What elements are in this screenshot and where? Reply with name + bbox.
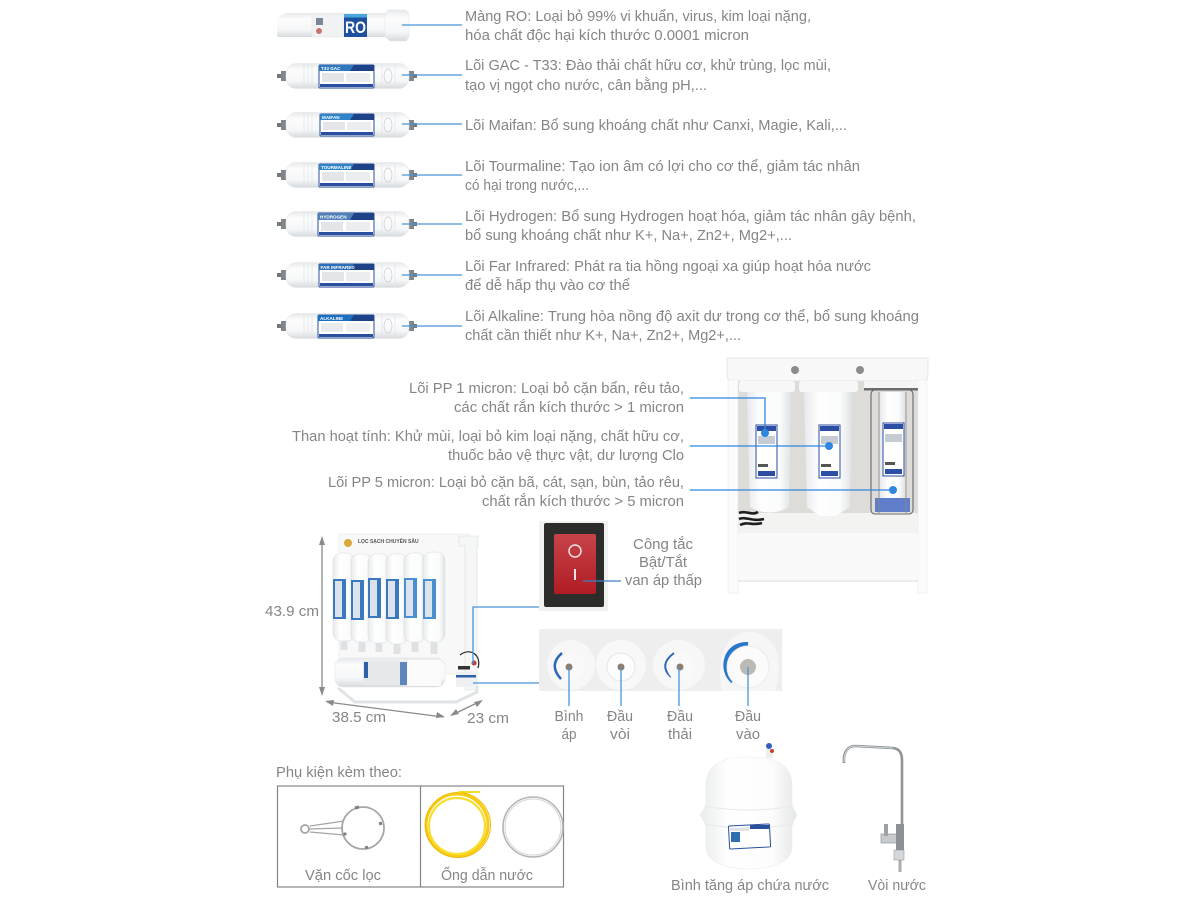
text: Far Infrared: Lõi Far Infrared: Phát ra tia hồng ngoại xa giúp hoạt hóa nước bbox=[465, 258, 871, 275]
cartridge: Tourmaline: TOURMALINE bbox=[321, 165, 352, 170]
text: activated carbon: Than hoạt tính: Khử mùi, loại bỏ kim loại nặng, chất hữu cơ, bbox=[292, 428, 684, 445]
text: port labels: Đầu bbox=[735, 708, 761, 725]
leader lines: pre-filters bbox=[690, 398, 897, 494]
text: faucet label: Vòi nước bbox=[868, 877, 926, 894]
cartridge: Alkaline: ALKALINE bbox=[320, 316, 343, 321]
text: Tourmaline: Lõi Tourmaline: Tạo ion âm có lợi cho cơ thể, giảm tác nhân bbox=[465, 158, 860, 175]
text: port labels bbox=[554, 708, 761, 743]
cartridge: Hydrogen bbox=[277, 212, 417, 236]
purifier main unit bbox=[333, 534, 479, 702]
text: GAC T33: Lõi GAC - T33: Đào thải chất hữu cơ, khử trùng, lọc mùi, bbox=[465, 57, 831, 74]
water faucet bbox=[844, 746, 904, 872]
text: Hydrogen: Lõi Hydrogen: Bổ sung Hydrogen hoạt hóa, giảm tác nhân gây bệnh, bbox=[465, 208, 916, 225]
text: RO membrane: hóa chất độc hại kích thước 0.0001 micron bbox=[465, 27, 749, 44]
text: PP 1 micron bbox=[409, 380, 684, 416]
icon: clear water tube bbox=[503, 797, 563, 857]
cartridge: Maifan bbox=[277, 112, 417, 138]
cartridge necks bbox=[344, 641, 434, 654]
cartridge: RO membrane bbox=[277, 10, 409, 41]
housing: left filter bbox=[739, 381, 795, 512]
text: switch label: van áp thấp bbox=[625, 572, 702, 589]
text: Alkaline: chất cần thiết như K+, Na+, Zn2+, Mg2+,... bbox=[465, 327, 741, 344]
text: Alkaline bbox=[465, 308, 919, 344]
text: Hydrogen bbox=[465, 208, 916, 244]
water ports photo bbox=[539, 629, 782, 691]
cartridge: Tourmaline bbox=[277, 162, 417, 188]
text: PP 5 micron: chất rắn kích thước > 5 micron bbox=[482, 493, 684, 510]
text: Far Infrared bbox=[465, 258, 871, 294]
housing: transparent filter bbox=[864, 381, 918, 514]
leader lines: cartridges to descriptions bbox=[402, 25, 462, 326]
pre-filter cabinet bbox=[727, 358, 928, 593]
leader lines: ports bbox=[569, 667, 748, 706]
text: port labels: Đầu bbox=[607, 708, 633, 725]
vertical cartridges bbox=[333, 552, 445, 644]
text: wrench label: Vặn cốc lọc bbox=[305, 867, 381, 884]
cartridge: Far Infrared: FAR INFRARED bbox=[320, 265, 355, 270]
dimension arrows bbox=[319, 536, 483, 718]
cartridge: Far Infrared bbox=[277, 262, 417, 288]
cartridge: GAC T33: T33 GAC bbox=[321, 66, 341, 71]
text: activated carbon: thuốc bảo vệ thực vật, dư lượng Clo bbox=[448, 447, 684, 464]
control panel and power wires bbox=[456, 652, 479, 687]
dimension labels: 23 cm bbox=[467, 710, 509, 727]
text: port labels: thải bbox=[668, 726, 692, 743]
text: Far Infrared: để dễ hấp thụ vào cơ thể bbox=[465, 277, 630, 294]
text: switch label: Công tắc bbox=[633, 536, 693, 553]
text: switch label: Bật/Tắt bbox=[639, 554, 688, 571]
purifier main unit: LỌC SẠCH CHUYÊN SÂU bbox=[358, 537, 419, 545]
text: Maifan: Lõi Maifan: Bổ sung khoáng chất như Canxi, Magie, Kali,... bbox=[465, 117, 847, 134]
text: PP 5 micron: Lõi PP 5 micron: Loại bỏ cặn bã, cát, sạn, bùn, tảo rêu, bbox=[328, 474, 684, 491]
horizontal RO cartridge bbox=[335, 658, 445, 687]
black wires bbox=[739, 512, 764, 525]
text: switch label bbox=[625, 536, 702, 589]
text: Hydrogen: bổ sung khoáng chất như K+, Na+, Zn2+, Mg2+,... bbox=[465, 227, 792, 244]
rocker switch photo bbox=[539, 521, 621, 611]
text: RO membrane: Màng RO: Loại bỏ 99% vi khuẩn, virus, kim loại nặng, bbox=[465, 8, 811, 25]
text: PP 1 micron: Lõi PP 1 micron: Loại bỏ cặn bẩn, rêu tảo, bbox=[409, 380, 684, 397]
text: tube label: Ống dẫn nước bbox=[441, 866, 533, 884]
cartridge: Alkaline bbox=[277, 314, 417, 338]
dimension labels: 43.9 cm bbox=[265, 603, 319, 620]
text: GAC T33: tạo vị ngọt cho nước, cân bằng pH,... bbox=[465, 77, 707, 94]
text: port labels: áp bbox=[562, 726, 576, 743]
panel: accessories bbox=[278, 786, 564, 887]
text: RO membrane bbox=[465, 8, 811, 44]
text: port labels: Bình bbox=[554, 708, 584, 725]
cartridge: RO membrane: RO bbox=[345, 18, 366, 37]
text: Tourmaline: có hại trong nước,... bbox=[465, 177, 589, 194]
cartridge: Hydrogen: HYDROGEN bbox=[320, 214, 347, 220]
text: Tourmaline bbox=[465, 158, 860, 194]
dimension labels bbox=[265, 603, 509, 727]
text: port labels: vào bbox=[736, 726, 760, 743]
text: port labels: vòi bbox=[610, 726, 630, 743]
text: activated carbon bbox=[292, 428, 684, 464]
base frame bbox=[338, 686, 477, 702]
text: Alkaline: Lõi Alkaline: Trung hòa nồng độ axit dư trong cơ thể, bổ sung khoáng bbox=[465, 308, 919, 325]
text: PP 1 micron: các chất rắn kích thước > 1 micron bbox=[454, 399, 684, 416]
cartridge: GAC T33 bbox=[277, 64, 417, 88]
text: port labels: Đầu bbox=[667, 708, 693, 725]
pressure tank bbox=[700, 743, 797, 869]
text: GAC T33 bbox=[465, 57, 831, 94]
housing: middle filter bbox=[799, 381, 858, 516]
leader lines: unit to switch and ports bbox=[473, 607, 541, 683]
text: tank label: Bình tăng áp chứa nước bbox=[671, 877, 829, 894]
text: PP 5 micron bbox=[328, 474, 684, 510]
heading: accessories: Phụ kiện kèm theo: bbox=[276, 764, 402, 781]
icon: filter housing wrench bbox=[301, 807, 384, 849]
icon: yellow water tube bbox=[426, 792, 490, 858]
cartridge: Maifan: MAIFAN bbox=[322, 115, 340, 120]
dimension labels: 38.5 cm bbox=[332, 709, 386, 726]
